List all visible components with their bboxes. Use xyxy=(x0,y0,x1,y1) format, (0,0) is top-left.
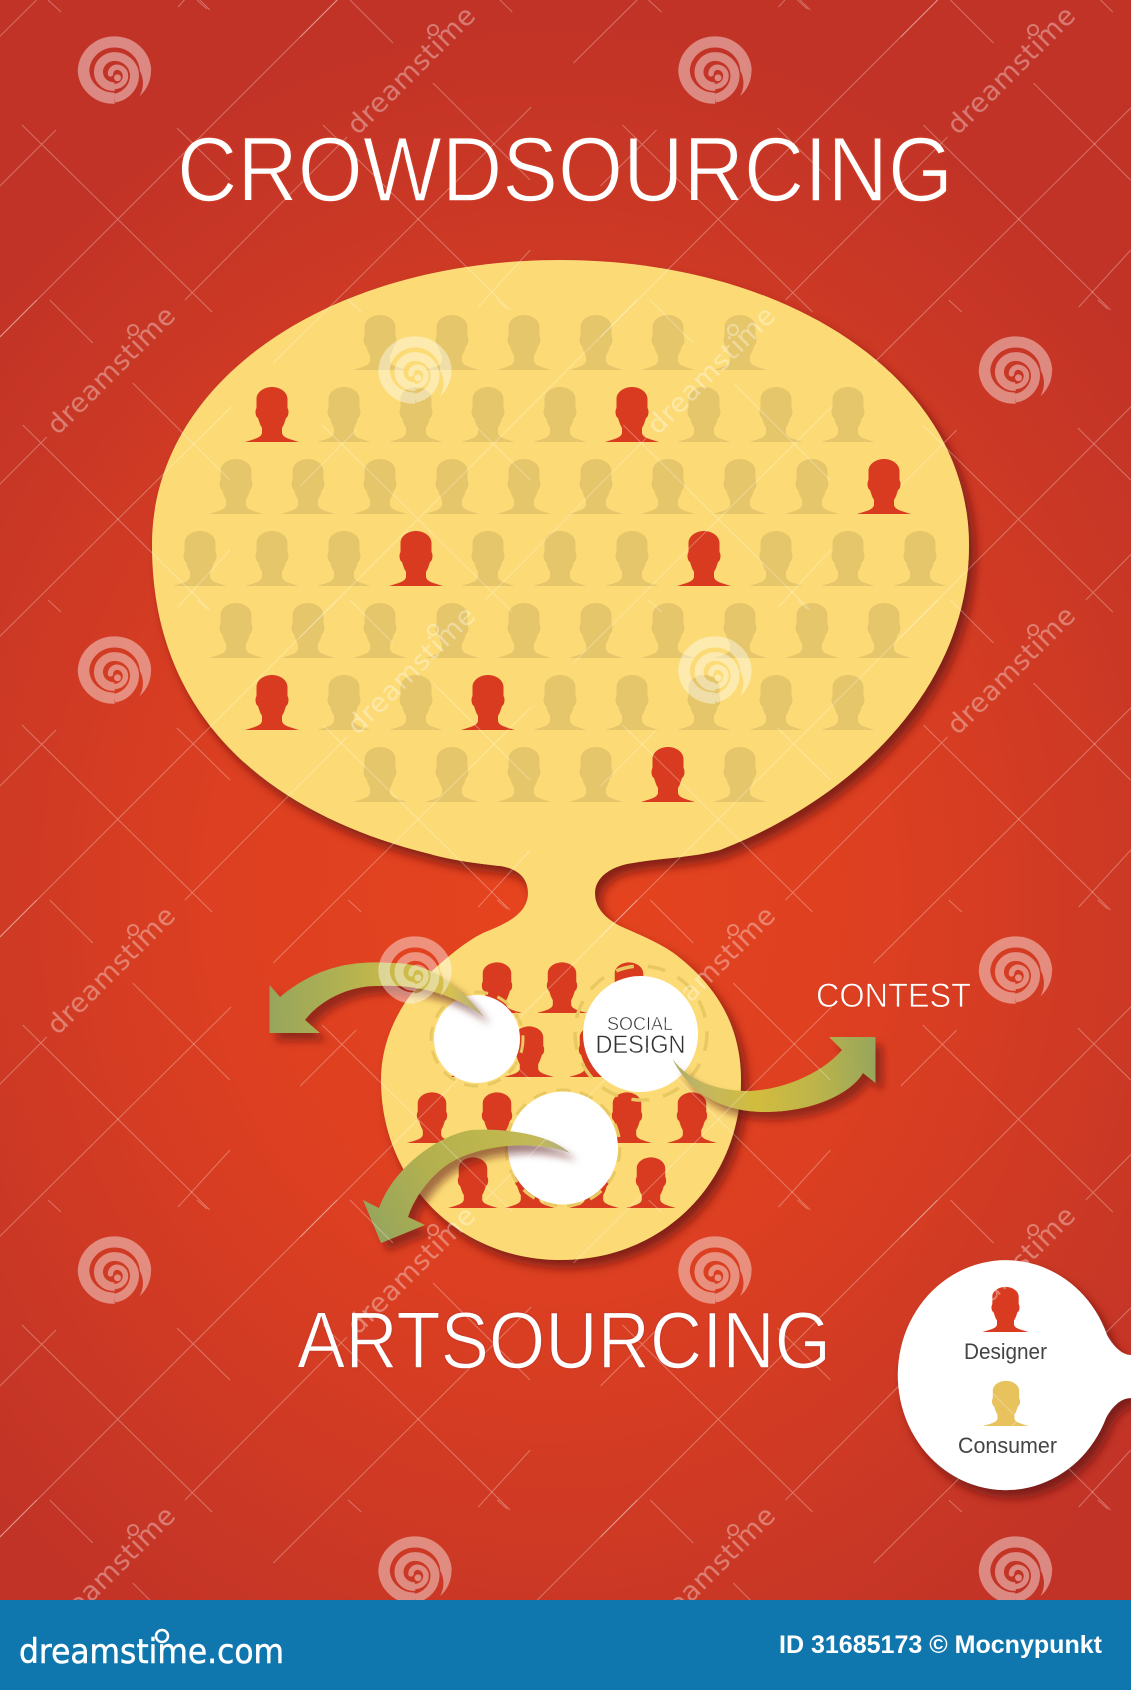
footer logo spiral xyxy=(156,1630,168,1642)
icon: designer xyxy=(983,1287,1028,1332)
watermark wordmarks: dreamstime xyxy=(41,1500,182,1641)
watermark spirals xyxy=(84,42,1052,1598)
designers in the small circle xyxy=(407,962,717,1208)
legend panel xyxy=(898,1260,1131,1490)
image id and credit: ID 31685173 © Mocnypunkt xyxy=(779,1631,1103,1659)
bubble: bottom empty circle xyxy=(506,1090,620,1206)
label: social: SOCIAL xyxy=(607,1014,673,1034)
watermark wordmarks: dreamstime xyxy=(341,0,482,141)
label: consumer: Consumer xyxy=(958,1433,1057,1458)
title: crowdsourcing: CROWDSOURCING xyxy=(177,119,953,221)
watermark wordmarks: dreamstime xyxy=(941,0,1082,141)
consumers row 1 xyxy=(353,315,767,370)
label: contest: CONTEST xyxy=(816,977,971,1015)
arrow: top left xyxy=(270,962,484,1033)
watermark wordmarks: dreamstime xyxy=(941,1200,1082,1341)
label: design: DESIGN xyxy=(596,1031,686,1059)
label: designer: Designer xyxy=(964,1339,1047,1364)
watermark wordmarks: dreamstime xyxy=(641,300,782,441)
crowd of people in the large oval xyxy=(173,315,947,802)
watermark wordmarks: dreamstime xyxy=(641,900,782,1041)
footer bar xyxy=(0,1600,1131,1690)
footer logo wordmark: dreamstime.com xyxy=(19,1632,284,1672)
consumers row 4 xyxy=(173,531,947,586)
crowd blob: large consumer oval joined to small designer circle xyxy=(152,260,969,1260)
designers in the crowd xyxy=(245,387,911,802)
watermark wordmarks: dreamstime xyxy=(341,1200,482,1341)
consumers row 3 xyxy=(209,459,839,514)
consumers row 5 xyxy=(209,603,911,658)
icon: consumer xyxy=(983,1381,1029,1426)
watermark wordmarks: dreamstime xyxy=(341,600,482,741)
consumers row 6 xyxy=(317,675,875,730)
arrow: right to contest xyxy=(672,1037,876,1112)
watermark wordmarks: dreamstime xyxy=(641,1500,782,1641)
consumers row 7 xyxy=(353,747,767,802)
bubble: left empty circle xyxy=(431,992,523,1086)
watermark wordmarks: dreamstime xyxy=(41,300,182,441)
arrow: bottom left xyxy=(363,1130,570,1243)
consumers row 2 xyxy=(317,387,875,442)
heading: artsourcing: ARTSOURCING xyxy=(297,1296,831,1386)
watermark wordmarks: dreamstime xyxy=(41,900,182,1041)
bubble: social design xyxy=(575,966,707,1100)
watermark wordmarks: dreamstime xyxy=(941,600,1082,741)
